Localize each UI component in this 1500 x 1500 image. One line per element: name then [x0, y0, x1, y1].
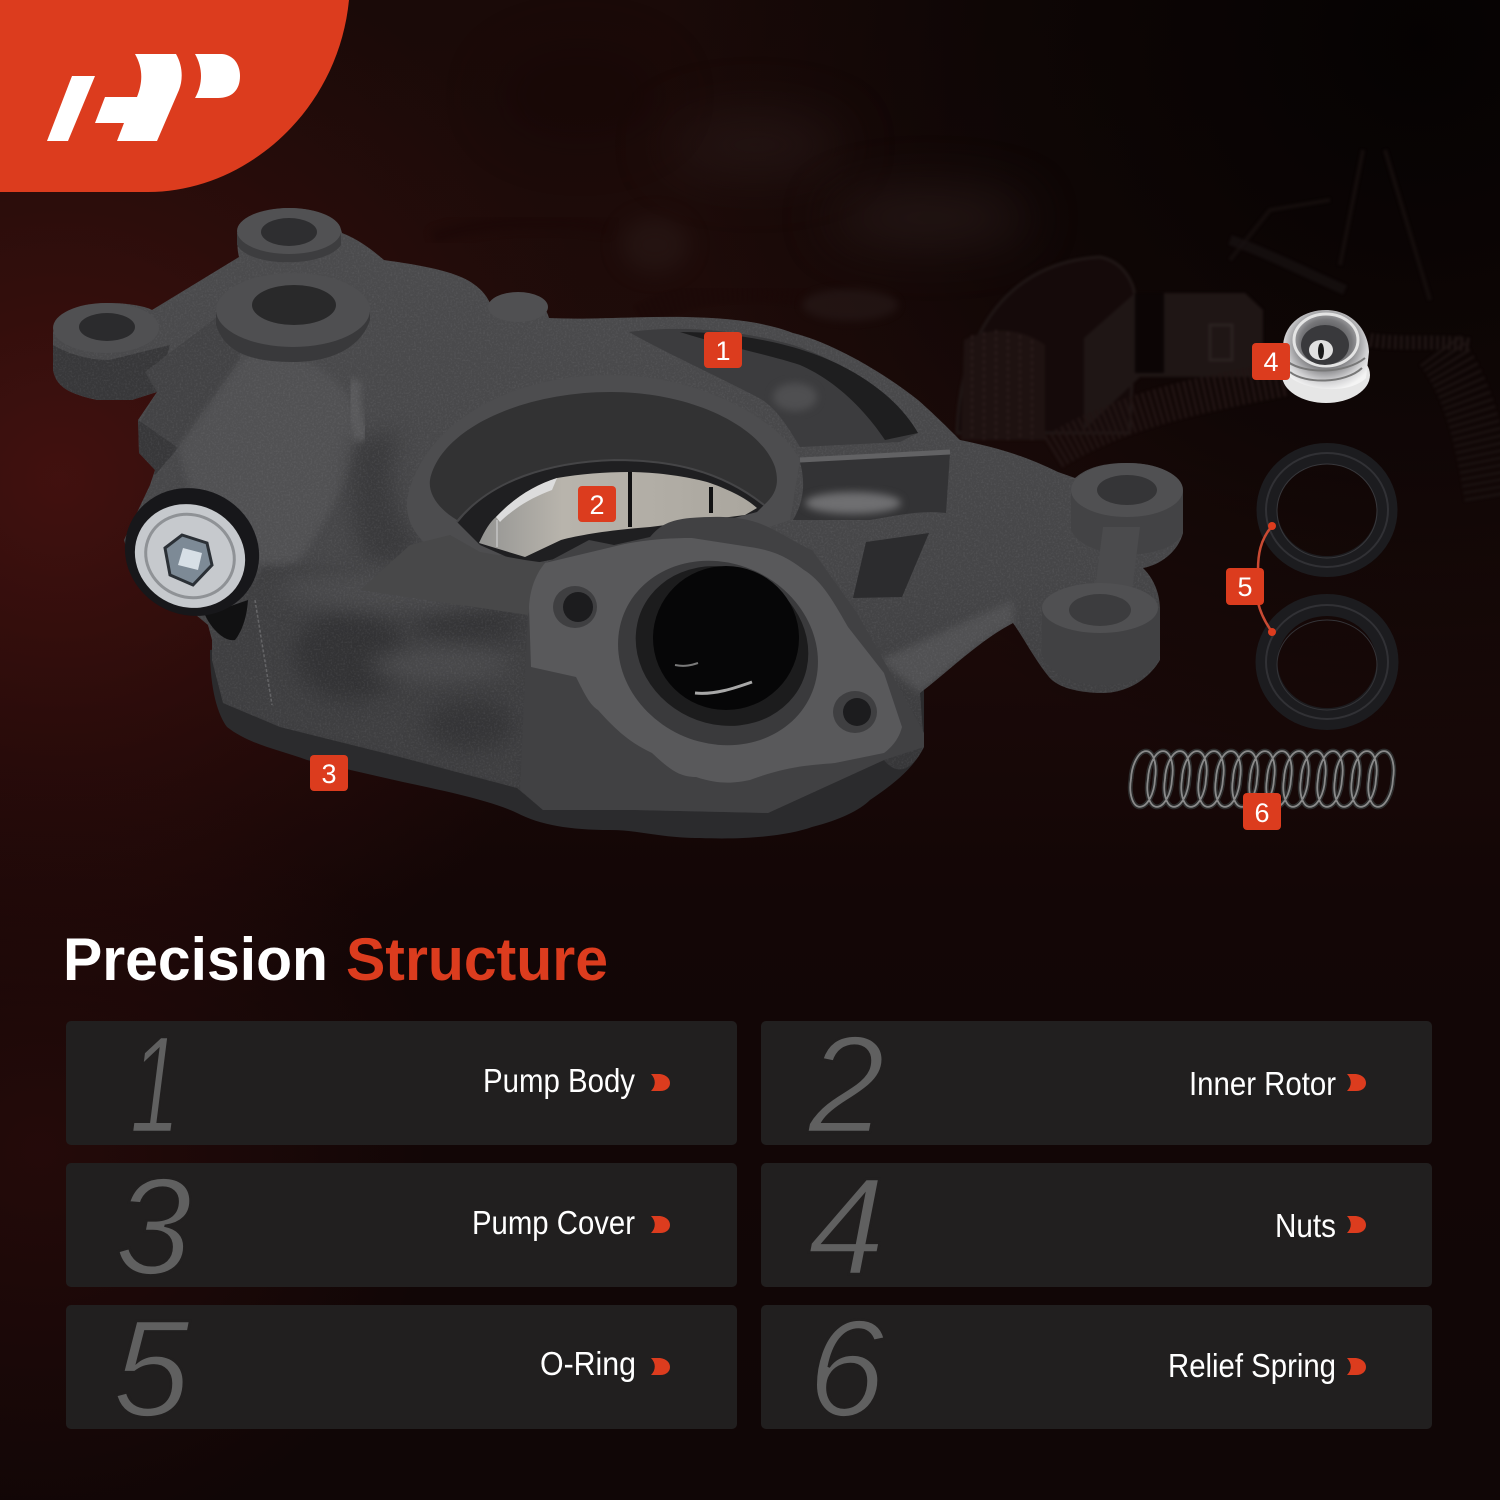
- mounting ear top: [237, 208, 341, 262]
- logo mark: [47, 54, 240, 141]
- callout badge 2: 2: [589, 490, 605, 520]
- callout badge 1: [704, 332, 742, 368]
- part: O-rings: [1258, 453, 1388, 719]
- panel: 4 Nuts: [761, 1150, 1432, 1304]
- central cavity wall: [430, 392, 777, 520]
- body shading: [30, 200, 1200, 820]
- callout badge 3: [310, 755, 348, 791]
- callout badge 5: 5: [1237, 572, 1253, 602]
- callout badge 6: 6: [1254, 798, 1270, 828]
- callout badge 2: [578, 486, 616, 522]
- part: nut: [1282, 310, 1370, 403]
- panel: 4 Nuts: Nuts: [1275, 1207, 1336, 1244]
- flange bolt holes: [553, 586, 877, 733]
- inlet bore: [588, 528, 848, 778]
- central cavity rim: [407, 375, 800, 560]
- panel: 5 O-Ring: 5: [113, 1292, 191, 1446]
- panel: 2 Inner Rotor: [761, 1008, 1432, 1162]
- heading: Precision: [63, 926, 328, 993]
- callout badge 1: 1: [715, 336, 731, 366]
- rib between ears: [1095, 527, 1140, 590]
- ghosted wiring harness: [957, 150, 1490, 500]
- inlet flange: [529, 538, 902, 783]
- callout badge 3: 3: [321, 759, 337, 789]
- heading: Structure: [346, 926, 608, 993]
- leader lines: [1258, 526, 1272, 632]
- panel: 1 Pump Body: Pump Body: [483, 1062, 635, 1099]
- panel: 5 O-Ring: [66, 1292, 737, 1446]
- o-ring upper: [1266, 453, 1388, 567]
- mounting boss: [216, 273, 370, 362]
- lower cavity ledge: [360, 535, 546, 615]
- mounting ear right lower: [1042, 583, 1160, 685]
- inner rotor: [457, 460, 764, 565]
- panel: 2 Inner Rotor: 2: [807, 1008, 885, 1162]
- part: relief spring: [1130, 751, 1394, 807]
- panel: 6 Relief Spring: 6: [808, 1292, 885, 1446]
- oil pump illustration: [30, 200, 1200, 838]
- top pocket: [629, 329, 918, 447]
- panel: 3 Pump Cover: [66, 1150, 737, 1304]
- panel: 1 Pump Body: [66, 1008, 737, 1162]
- small boss: [488, 292, 548, 322]
- callout badge 4: [1252, 343, 1290, 380]
- panel: 3 Pump Cover: Pump Cover: [472, 1204, 635, 1241]
- panel: 5 O-Ring: O-Ring: [540, 1345, 636, 1382]
- callout badge 5: [1226, 568, 1264, 605]
- pump cover gasket: [210, 600, 924, 838]
- panel: 6 Relief Spring: Relief Spring: [1168, 1347, 1336, 1384]
- heading: [63, 926, 608, 993]
- relief valve bolt: [104, 466, 280, 640]
- o-ring lower: [1266, 605, 1388, 719]
- flange housing shoulder: [520, 517, 924, 813]
- mounting ear right upper: [1071, 463, 1183, 554]
- panel: 4 Nuts: 4: [808, 1150, 885, 1304]
- panel: 3 Pump Cover: 3: [115, 1150, 192, 1304]
- logo badge: [0, 0, 349, 192]
- callout badge 4: 4: [1263, 347, 1279, 377]
- panel: 6 Relief Spring: [761, 1292, 1432, 1446]
- pump body casting: [53, 208, 1183, 813]
- panel: 2 Inner Rotor: Inner Rotor: [1189, 1065, 1336, 1102]
- mounting ear left: [53, 303, 159, 353]
- callout badge 6: [1243, 793, 1281, 830]
- right recess: [793, 452, 950, 598]
- panel: 1 Pump Body: 1: [130, 1008, 180, 1162]
